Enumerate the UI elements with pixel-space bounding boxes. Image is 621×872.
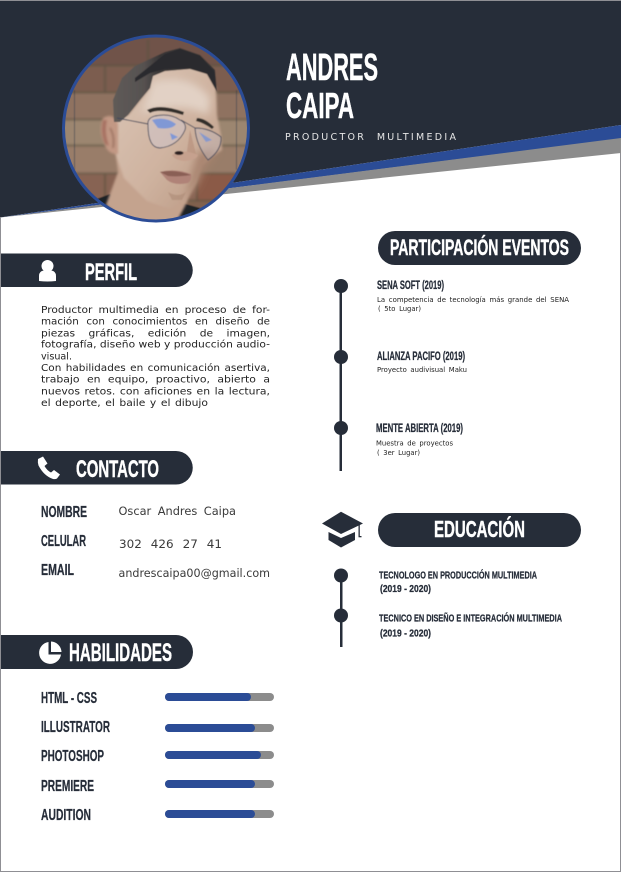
header banner — [0, 0, 621, 218]
profile text: piezas gráficas, edición de imagen, — [41, 327, 270, 339]
photo ring — [64, 36, 248, 221]
education: tecnologo — [379, 568, 537, 595]
contact details: CELULAR — [41, 533, 86, 550]
event: mente abierta: MENTE ABIERTA (2019) — [376, 423, 463, 435]
events timeline — [334, 279, 348, 471]
name — [286, 47, 378, 126]
event: sena soft: SENA SOFT (2019) — [377, 280, 444, 292]
brows, nose, mouth — [147, 107, 214, 200]
event: mente abierta: Muestra de proyectos — [376, 440, 453, 448]
event: sena soft: ( 5to Lugar) — [378, 305, 421, 313]
skill list — [41, 690, 274, 824]
profile text: fotografía, diseño web y producción audio- — [41, 339, 270, 351]
contact details: andrescaipa00@gmail.com — [118, 566, 270, 580]
event: mente abierta — [376, 423, 463, 457]
name: ANDRES — [286, 47, 378, 89]
icon: pie chart — [39, 642, 62, 664]
education: tecnico — [379, 612, 562, 640]
profile text: el deporte, el baile y el dibujo — [41, 398, 208, 409]
event: sena soft — [377, 280, 569, 313]
contact details: NOMBRE — [41, 504, 87, 521]
neck and face — [106, 66, 222, 225]
hair — [113, 48, 217, 122]
profile text: trabajo en equipo, proactivo, abierto a — [41, 375, 270, 386]
skill: html css: HTML - CSS — [41, 690, 97, 707]
profile text: mación con conocimientos en diseño de — [41, 316, 270, 328]
education: tecnico: (2019 - 2020) — [380, 628, 431, 640]
skill: audition: AUDITION — [41, 807, 91, 824]
event: alianza pacifo: Proyecto audivisual Maku — [377, 366, 467, 374]
heading: participacion eventos — [378, 231, 581, 265]
heading: perfil: PERFIL — [85, 259, 137, 286]
skill: illustrator — [41, 719, 274, 736]
profile text: Con habilidades en comunicación asertiva, — [41, 362, 270, 374]
skill: html css — [41, 690, 274, 707]
education: tecnologo: (2019 - 2020) — [380, 583, 431, 595]
heading: perfil — [0, 254, 193, 287]
brick rows — [65, 38, 247, 208]
profile text: nuevos retos. con aficiones en la lectura, — [41, 387, 270, 398]
icon: person — [39, 260, 56, 282]
heading: contacto: CONTACTO — [76, 456, 159, 483]
event: sena soft: La competencia de tecnología más grande del SENA — [377, 296, 569, 304]
contact details — [41, 504, 270, 580]
profile text: Productor multimedia en proceso de for- — [41, 305, 270, 316]
heading: contacto — [0, 451, 193, 484]
event: alianza pacifo: ALIANZA PACIFO (2019) — [377, 351, 465, 363]
education: tecnologo: TECNOLOGO EN PRODUCCIÓN MULTIMEDIA — [379, 568, 537, 582]
event: mente abierta: ( 3er Lugar) — [377, 449, 420, 457]
skill: illustrator: ILLUSTRATOR — [41, 719, 110, 736]
icon: phone — [38, 456, 60, 479]
skill: audition — [41, 807, 274, 824]
profile text: visual. — [41, 352, 72, 363]
shirt — [98, 194, 200, 216]
heading: educacion — [378, 513, 581, 547]
profile text — [41, 305, 270, 409]
skill: photoshop — [41, 748, 274, 765]
skill: premiere: PREMIERE — [41, 778, 94, 795]
profile photo — [65, 38, 247, 220]
heading: educacion: EDUCACIÓN — [434, 515, 525, 542]
skill: premiere — [41, 778, 274, 795]
event: alianza pacifo — [377, 351, 467, 374]
education timeline — [334, 568, 348, 647]
name: CAIPA — [286, 85, 354, 126]
job title: PRODUCTOR MULTIMEDIA — [285, 132, 456, 143]
contact details: EMAIL — [41, 562, 74, 579]
contact details: Oscar Andres Caipa — [118, 504, 236, 518]
ear — [101, 116, 118, 154]
heading: habilidades — [0, 635, 193, 669]
contact details: 302 426 27 41 — [119, 537, 222, 551]
skill: photoshop: PHOTOSHOP — [41, 748, 104, 765]
heading: habilidades: HABILIDADES — [69, 639, 172, 667]
icon: graduation cap — [322, 512, 363, 548]
glasses — [117, 115, 221, 160]
